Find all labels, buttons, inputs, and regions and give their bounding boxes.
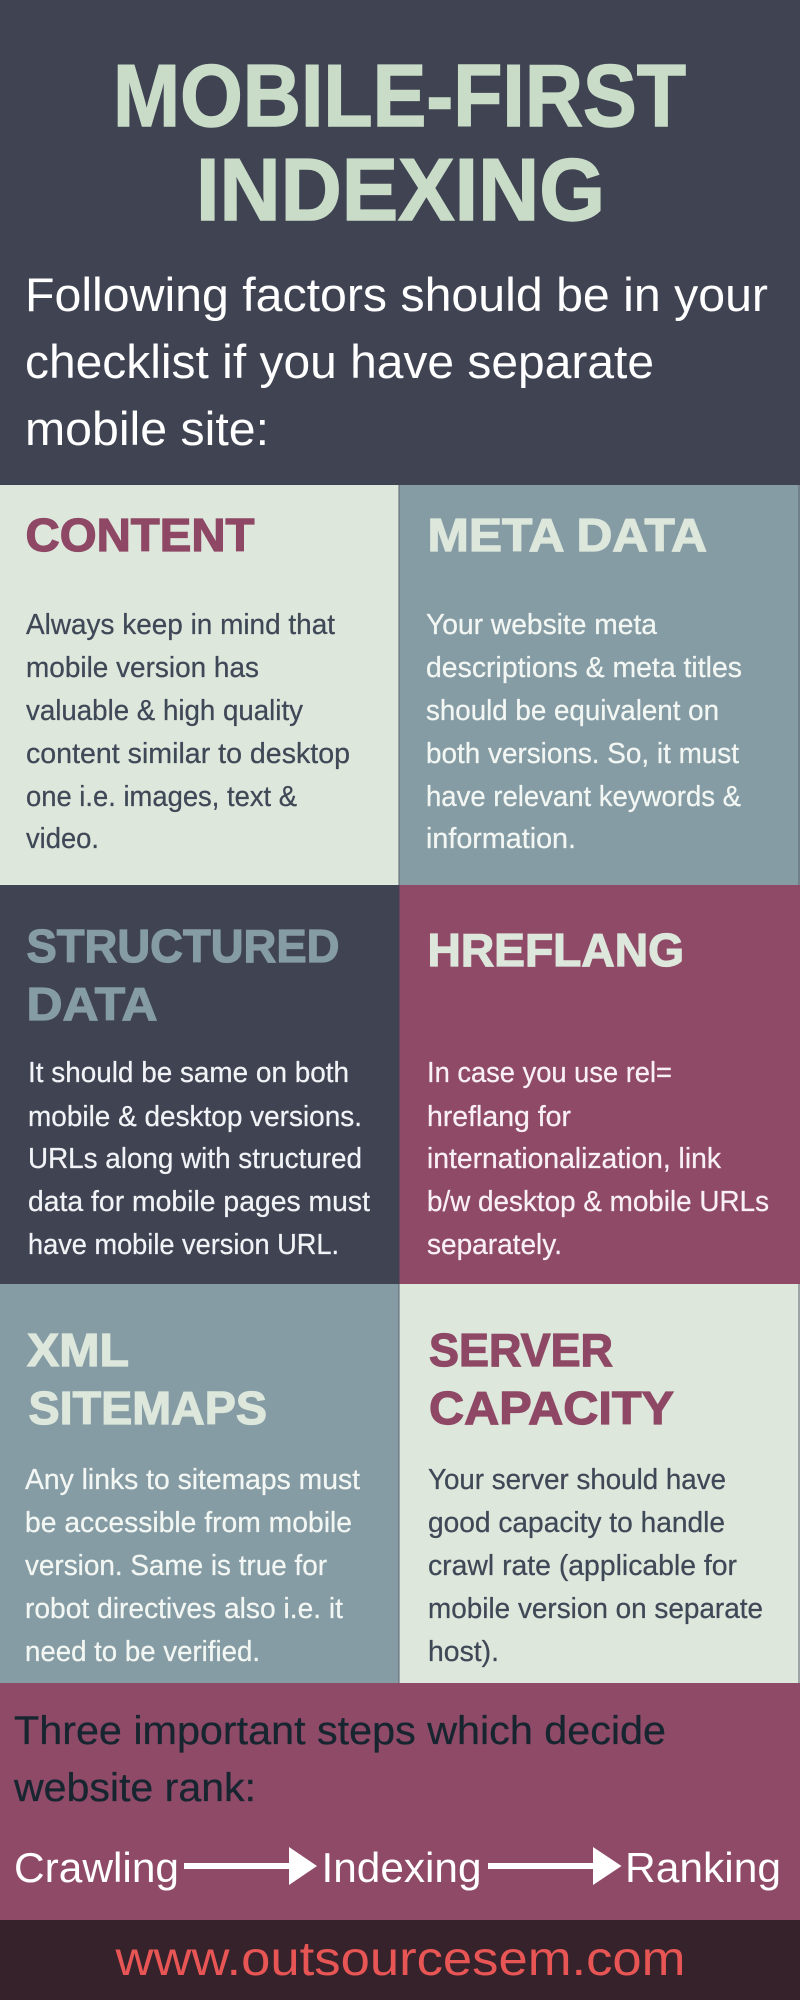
body: hreflang: b/w desktop & mobile URLs: [427, 1186, 769, 1218]
title: INDEXING: [196, 140, 605, 239]
body: hreflang: In case you use rel=: [427, 1057, 672, 1089]
heading: server capacity: SERVER: [429, 1324, 613, 1376]
body: content: video.: [26, 823, 99, 855]
body: xml sitemaps: version. Same is true for: [25, 1550, 327, 1582]
body: xml sitemaps: robot directives also i.e. it: [25, 1593, 343, 1625]
body: xml sitemaps: be accessible from mobile: [25, 1507, 352, 1539]
arrow: crawling to indexing: [184, 1847, 317, 1885]
body: structured data: mobile & desktop versions.: [28, 1101, 362, 1133]
body: server capacity: good capacity to handle: [428, 1507, 725, 1539]
intro text: checklist if you have separate: [25, 336, 654, 389]
body: structured data: URLs along with structured: [28, 1143, 362, 1175]
title: [113, 46, 686, 239]
steps heading: Three important steps which decide: [14, 1709, 666, 1753]
body: content: [26, 609, 350, 855]
body: content: Always keep in mind that: [26, 609, 335, 641]
body: hreflang: internationalization, link: [427, 1143, 722, 1175]
body: meta data: descriptions & meta titles: [426, 652, 742, 684]
intro text: Following factors should be in your: [25, 269, 768, 322]
heading: server capacity: CAPACITY: [429, 1382, 674, 1434]
body: server capacity: host).: [428, 1636, 499, 1668]
body: xml sitemaps: [25, 1464, 360, 1668]
body: content: mobile version has: [26, 652, 259, 684]
body: server capacity: [428, 1464, 763, 1668]
step: indexing: Indexing: [322, 1844, 482, 1891]
panel: hreflang: [400, 885, 800, 1284]
heading: xml sitemaps: [27, 1324, 267, 1434]
intro text: mobile site:: [25, 403, 269, 456]
body: hreflang: hreflang for: [427, 1101, 572, 1133]
body: structured data: It should be same on both: [28, 1057, 349, 1089]
heading: structured data: [26, 920, 340, 1030]
panel: meta data: [400, 485, 800, 885]
heading: content: CONTENT: [26, 509, 254, 561]
body: content: one i.e. images, text &: [26, 781, 297, 813]
step: ranking: Ranking: [625, 1844, 781, 1891]
panel: server capacity: [400, 1284, 800, 1683]
heading: server capacity: [429, 1324, 674, 1434]
heading: structured data: DATA: [26, 978, 158, 1030]
body: structured data: data for mobile pages must: [28, 1186, 370, 1218]
body: structured data: have mobile version URL.: [28, 1229, 339, 1261]
header panel: [25, 46, 768, 456]
heading: meta data: META DATA: [428, 509, 707, 561]
body: hreflang: [427, 1057, 769, 1261]
body: server capacity: crawl rate (applicable for: [428, 1550, 738, 1582]
body: meta data: information.: [426, 823, 576, 855]
heading: xml sitemaps: SITEMAPS: [28, 1382, 267, 1434]
footer band: [0, 1920, 800, 2000]
body: meta data: [426, 609, 742, 855]
steps heading: website rank:: [13, 1766, 256, 1810]
body: hreflang: separately.: [427, 1229, 562, 1261]
steps heading: [13, 1709, 666, 1810]
body: meta data: should be equivalent on: [426, 695, 719, 727]
title: MOBILE-FIRST: [113, 46, 686, 145]
body: content: valuable & high quality: [26, 695, 304, 727]
panel: ranking steps: [0, 1683, 800, 1920]
panel: xml sitemaps: [0, 1284, 400, 1683]
body: structured data: [28, 1057, 370, 1261]
body: meta data: both versions. So, it must: [426, 738, 739, 770]
body: xml sitemaps: Any links to sitemaps must: [25, 1464, 360, 1496]
body: server capacity: Your server should have: [428, 1464, 726, 1496]
panel: content: [0, 485, 400, 885]
body: meta data: Your website meta: [426, 609, 657, 641]
website url: www.outsourcesem.com: [114, 1933, 686, 1986]
step: crawling: Crawling: [14, 1844, 179, 1891]
heading: hreflang: HREFLANG: [428, 924, 684, 976]
heading: structured data: STRUCTURED: [26, 920, 340, 972]
panel: structured data: [0, 885, 400, 1284]
body: xml sitemaps: need to be verified.: [25, 1636, 260, 1668]
intro text: [25, 269, 768, 456]
body: content: content similar to desktop: [26, 738, 350, 770]
arrow: indexing to ranking: [488, 1847, 622, 1885]
heading: xml sitemaps: XML: [27, 1324, 129, 1376]
body: server capacity: mobile version on separate: [428, 1593, 763, 1625]
body: meta data: have relevant keywords &: [426, 781, 741, 813]
